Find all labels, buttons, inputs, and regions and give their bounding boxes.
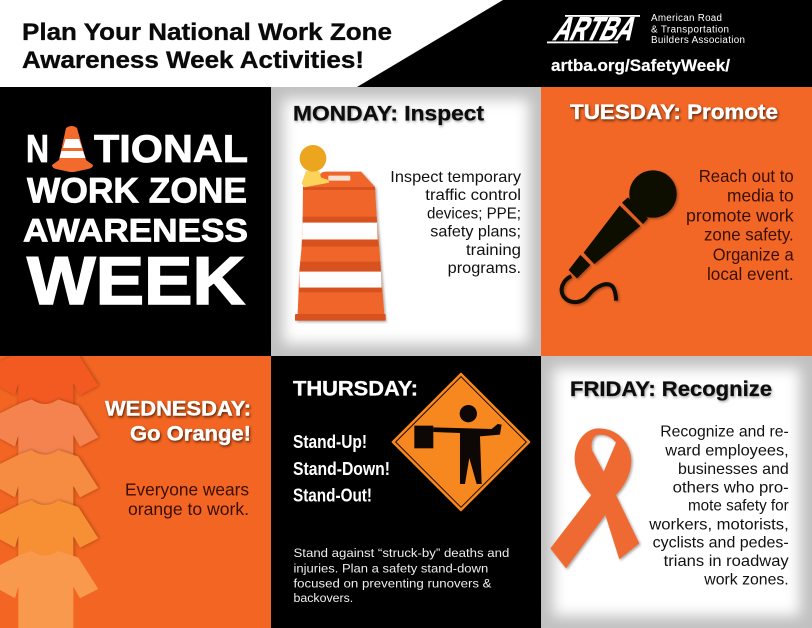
Monday description: safety plans; <box>430 224 521 240</box>
Monday description: training <box>466 242 521 259</box>
Tuesday description: promote work <box>686 206 794 226</box>
shirt 1 <box>0 356 100 405</box>
Tuesday description: media to <box>727 186 794 206</box>
Friday description: cyclists and pedes- <box>653 535 789 552</box>
Tuesday description: Organize a <box>713 244 794 264</box>
event name <box>23 128 248 319</box>
shirt 4 <box>0 498 100 556</box>
Wednesday description: Everyone wears <box>125 480 249 500</box>
association name <box>651 13 745 46</box>
panel: Wednesday <box>0 348 271 628</box>
heading: Wednesday: Go Orange! <box>130 422 251 446</box>
shirt 2 <box>0 398 100 456</box>
title: Awareness Week Activities! <box>22 47 364 74</box>
heading: Wednesday <box>105 397 251 446</box>
heading: Monday: MONDAY: Inspect <box>293 102 484 126</box>
Stand-Up, Stand-Down, Stand-Out: Stand-Out! <box>293 486 372 506</box>
event name: A <box>59 128 87 171</box>
title: Plan Your National Work Zone <box>22 19 392 46</box>
Friday description: workers, motorists, <box>648 516 789 533</box>
Friday description: Recognize and re- <box>660 424 789 441</box>
Monday description <box>390 169 521 277</box>
Monday description: devices; PPE; <box>427 206 521 222</box>
icon: traffic cone <box>52 126 93 172</box>
Thursday description: injuries. Plan a safety stand-down <box>294 562 488 576</box>
Tuesday description: local event. <box>707 264 794 284</box>
header background <box>0 0 812 87</box>
icon: orange ribbon <box>550 428 639 568</box>
heading: Friday: FRIDAY: Recognize <box>570 377 772 401</box>
Tuesday description <box>686 166 794 284</box>
Monday description: programs. <box>448 260 521 277</box>
Friday description <box>648 424 789 588</box>
shirt 3 <box>0 448 100 506</box>
icon: stack of orange shirts <box>0 348 98 628</box>
Friday description: trians in roadway <box>664 553 789 570</box>
Stand-Up, Stand-Down, Stand-Out: Stand-Down! <box>293 459 390 479</box>
panel: Tuesday <box>541 87 812 356</box>
panel: Friday <box>541 356 812 628</box>
association name: Builders Association <box>651 35 745 46</box>
Stand-Up, Stand-Down, Stand-Out: Stand-Up! <box>293 432 367 452</box>
Stand-Up, Stand-Down, Stand-Out <box>293 432 390 506</box>
icon: traffic barrel with light <box>295 145 386 321</box>
website URL: artba.org/SafetyWeek/ <box>551 57 730 75</box>
Thursday description: focused on preventing runovers & <box>294 576 492 590</box>
event name: WORK ZONE <box>27 172 247 210</box>
Friday description: work zones. <box>703 571 789 588</box>
association name: American Road <box>651 13 722 24</box>
title <box>22 19 392 74</box>
Monday description: Inspect temporary <box>390 169 521 186</box>
heading: Wednesday: WEDNESDAY: <box>105 397 251 421</box>
event name: WEEK <box>27 243 245 319</box>
association name: & Transportation <box>651 24 729 36</box>
panel: National Work Zone Awareness Week <box>0 87 271 356</box>
heading: Tuesday: TUESDAY: Promote <box>570 100 778 124</box>
icon: microphone <box>562 170 677 302</box>
shirt 5 <box>0 551 98 628</box>
ARTBA logo <box>547 12 745 48</box>
Friday description: others who pro- <box>673 479 789 496</box>
Thursday description: Stand against “struck-by” deaths and <box>294 546 509 560</box>
Monday description: traffic control <box>425 187 521 204</box>
event name: AWARENESS <box>23 212 248 248</box>
Wednesday description <box>125 480 249 519</box>
event name: N <box>26 128 49 171</box>
Friday description: ward employees, <box>664 442 789 459</box>
panel: Monday <box>271 87 541 356</box>
Thursday description <box>294 546 509 605</box>
Wednesday description: orange to work. <box>128 499 249 519</box>
event name: TIONAL <box>94 128 248 171</box>
logo wordmark: ARTBA <box>548 12 643 48</box>
Tuesday description: Reach out to <box>699 166 794 186</box>
Friday description: mote safety for <box>688 498 789 515</box>
Thursday description: backovers. <box>294 591 353 605</box>
icon: flagger warning sign <box>393 374 529 510</box>
heading: Thursday: THURSDAY: <box>293 377 418 401</box>
Tuesday description: zone safety. <box>704 224 794 244</box>
panel: Thursday <box>271 356 541 628</box>
flagger figure <box>414 405 502 484</box>
Friday description: businesses and <box>678 461 789 478</box>
warning light <box>300 145 329 187</box>
